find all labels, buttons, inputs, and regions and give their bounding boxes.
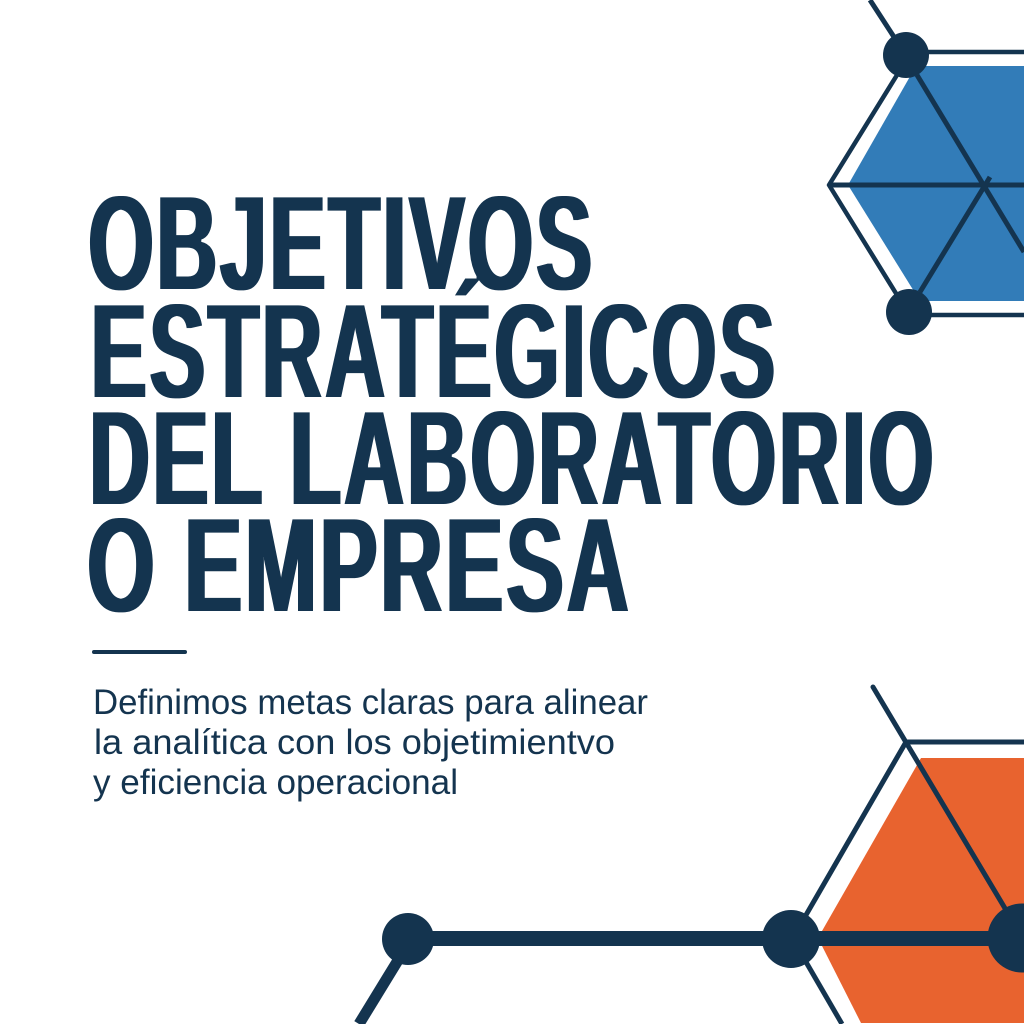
icon: orange hexagon network (762, 687, 1024, 1024)
title: OBJETIVOS (88, 167, 595, 319)
icon: connector line with node (359, 913, 791, 1024)
divider rule (92, 650, 187, 654)
icon: blue hexagon network (829, 0, 1024, 335)
title (88, 167, 936, 641)
subtitle text: la analítica con los objetimientvo (94, 723, 615, 762)
subtitle text: y eficiencia operacional (93, 763, 458, 802)
title: O EMPRESA (88, 489, 632, 641)
subtitle text (93, 683, 648, 802)
subtitle text: Definimos metas claras para alinear (93, 683, 648, 722)
